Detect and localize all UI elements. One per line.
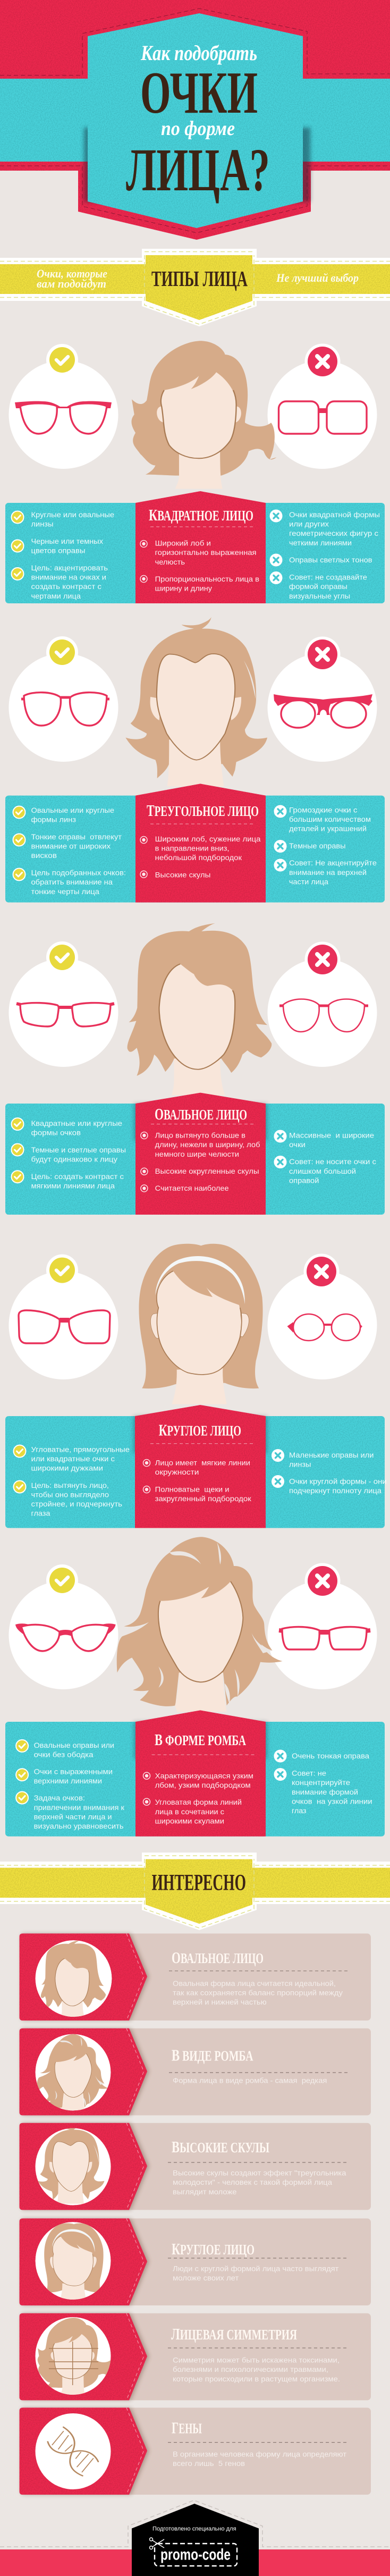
heading text: ИНТЕРЕСНО: [152, 1871, 246, 1896]
list of good frames: Очки с выраженными: [34, 1767, 113, 1775]
card text: выглядит моложе: [173, 2188, 237, 2196]
list of good frames: мягкими линиями лица: [31, 1181, 115, 1190]
left caption: [37, 267, 107, 290]
card text: [173, 2264, 339, 2282]
list of good frames: [31, 1119, 126, 1190]
list of bad frames: [289, 1451, 387, 1495]
list of bad frames: [292, 1752, 372, 1815]
teal middle band: [0, 79, 390, 162]
section: diamond face: [5, 1537, 385, 1837]
red band: [0, 2549, 390, 2576]
left circle with good glasses: [9, 1255, 118, 1379]
right circle with bad glasses: [268, 1563, 377, 1689]
card text: [173, 2356, 340, 2383]
face description: лбом, узким подбородком: [155, 1781, 251, 1789]
face description: Широкий лоб и: [155, 539, 211, 548]
credit line: Подготовлено специально для: [152, 2526, 236, 2532]
list of bad frames: Маленькие оправы или: [289, 1451, 374, 1459]
info panel: oval face: [5, 1093, 385, 1215]
logo: [150, 2538, 237, 2566]
bullets: [140, 837, 147, 878]
card text: болезнями и психологическими травмами,: [173, 2365, 328, 2373]
list of good frames: Овальные или круглые: [31, 806, 114, 814]
stitched seam: [0, 2501, 390, 2547]
list of bad frames: внимание на верхней: [289, 868, 367, 877]
list of bad frames: Совет: не носите очки с: [289, 1157, 376, 1166]
list of bad frames: Массивные и широкие: [289, 1131, 374, 1140]
info panel: diamond face: [5, 1710, 385, 1837]
list of bad frames: Очень тонкая оправа: [292, 1752, 369, 1760]
face description: Полноватые щеки и: [155, 1485, 230, 1493]
list of bad frames: оправой: [289, 1176, 319, 1185]
card text: молодости" - человек с такой формой лица: [173, 2178, 332, 2186]
list of good frames: Цель: создать контраст с: [31, 1172, 124, 1181]
panel title: ОВАЛЬНОЕ ЛИЦО: [155, 1105, 247, 1123]
list of good frames: Круглые или овальные: [31, 510, 114, 519]
list of good frames: [31, 1445, 130, 1518]
header: [0, 0, 390, 240]
face description: Высокие округленные скулы: [155, 1167, 259, 1175]
fact card: round face: [19, 2218, 371, 2305]
list of good frames: внимание на очках и: [31, 573, 106, 582]
right caption: Не лучший выбор: [276, 271, 359, 284]
lower red band with badge backing: [0, 162, 390, 240]
list of bad frames: Очки круглой формы - они: [289, 1477, 387, 1485]
list of good frames: визуально уравновесить: [34, 1822, 124, 1830]
cross icons: [274, 1750, 287, 1781]
bullets: [143, 1460, 150, 1493]
list of good frames: Черные или темных: [31, 537, 103, 545]
cross icons: [270, 509, 283, 584]
heading text: ТИПЫ ЛИЦА: [151, 266, 248, 291]
face description: Угловатая форма линий: [155, 1798, 242, 1806]
list of good frames: цветов оправы: [31, 546, 85, 555]
card text: Форма лица в виде ромба - самая редкая: [173, 2077, 327, 2085]
list of bad frames: деталей и украшений: [289, 824, 367, 833]
list of bad frames: формой оправы: [289, 582, 347, 591]
woman head: round face: [139, 1244, 263, 1404]
list of good frames: Квадратные или круглые: [31, 1119, 122, 1127]
list of bad frames: или других: [289, 520, 329, 528]
list of good frames: [34, 1741, 125, 1830]
left circle with good glasses: [9, 344, 118, 469]
card text: моложе своих лет: [173, 2274, 239, 2282]
right circle with bad glasses: [268, 343, 377, 469]
portrait: [35, 1940, 112, 2018]
face description: [155, 1772, 253, 1825]
face description: в направлении вниз,: [155, 844, 230, 853]
list of bad frames: очки: [289, 1140, 306, 1149]
list of bad frames: большим количеством: [289, 815, 371, 823]
face description: [155, 1131, 260, 1192]
face description: [155, 835, 261, 879]
list of good frames: формы линз: [31, 815, 76, 824]
face description: челюсть: [155, 558, 185, 566]
section: triangular face: [5, 617, 385, 903]
panel title: ТРЕУГОЛЬНОЕ ЛИЦО: [147, 801, 259, 820]
section: square face: [5, 341, 385, 603]
list of bad frames: части лица: [289, 877, 328, 886]
bullets: [143, 1772, 150, 1805]
list of bad frames: Совет: Не акцентируйте: [289, 858, 377, 867]
right circle with bad glasses: [268, 637, 377, 762]
face description: широкими скулами: [155, 1817, 224, 1825]
list of bad frames: Громоздкие очки с: [289, 806, 357, 814]
list of bad frames: линзы: [289, 1460, 311, 1468]
list of good frames: формы очков: [31, 1129, 81, 1137]
list of bad frames: Очки квадратной формы: [289, 510, 380, 519]
card text: которые происходили в растущем организме.: [173, 2375, 340, 2383]
woman head: square face: [131, 341, 276, 489]
list of bad frames: Оправы светлых тонов: [289, 555, 372, 564]
list of bad frames: визуальные углы: [289, 592, 350, 600]
card text: [173, 1980, 343, 2006]
face description: закругленный подбородок: [155, 1494, 252, 1503]
card title: КРУГЛОЕ ЛИЦО: [172, 2240, 255, 2258]
left caption: Очки, которые: [37, 267, 107, 280]
title: ОЧКИ: [140, 60, 258, 126]
check icons: [16, 1740, 28, 1804]
section: round face: [5, 1244, 387, 1528]
left caption: вам подойдут: [37, 277, 106, 290]
red top band: [0, 0, 390, 79]
footer: [0, 2501, 390, 2576]
heading band: interesting: [0, 1853, 390, 1930]
cross icons: [272, 1449, 284, 1488]
card text: так как сохраняется баланс пропорций между: [173, 1989, 343, 1997]
teal badge: [88, 13, 303, 228]
list of good frames: верхними линиями: [34, 1777, 102, 1785]
list of bad frames: геометрических фигур с: [289, 529, 378, 537]
card text: всего лишь 5 генов: [173, 2460, 245, 2468]
logo: promo-code: [160, 2546, 231, 2563]
face description: Считается наиболее: [155, 1184, 229, 1192]
list of good frames: тонкие черты лица: [31, 887, 99, 896]
card title: ВЫСОКИЕ СКУЛЫ: [172, 2137, 269, 2156]
bullets: [140, 540, 147, 583]
list of good frames: Овальные оправы или: [34, 1741, 114, 1749]
card text: Овальная форма лица считается идеальной,: [173, 1980, 336, 1988]
list of good frames: висков: [31, 851, 57, 860]
list of bad frames: очков на узкой линии: [292, 1797, 372, 1805]
portrait: [35, 2124, 111, 2205]
list of good frames: Цель подобранных очков:: [31, 869, 126, 877]
list of good frames: обратить внимание на: [31, 878, 113, 886]
icon: DNA helix: [48, 2427, 98, 2476]
cross icons: [274, 805, 287, 872]
panel title: В ФОРМЕ РОМБА: [155, 1730, 246, 1749]
list of good frames: линзы: [31, 520, 53, 528]
list of bad frames: Темные оправы: [289, 841, 345, 850]
list of bad frames: глаз: [292, 1806, 307, 1815]
black badge: [132, 2504, 259, 2576]
fact card: oval face: [19, 1933, 371, 2021]
list of good frames: глаза: [31, 1509, 50, 1518]
list of good frames: чтобы оно выглядело: [31, 1490, 109, 1499]
face description: лица в сочетании с: [155, 1807, 224, 1816]
white circle: [35, 2413, 111, 2489]
list of good frames: внимание от широких: [31, 842, 111, 851]
card title: ЛИЦЕВАЯ СИММЕТРИЯ: [171, 2325, 297, 2343]
face description: горизонтально выраженная: [155, 548, 257, 557]
left circle with good glasses: [9, 941, 118, 1067]
list of bad frames: концентрируйте: [292, 1778, 350, 1787]
list of good frames: верхней части лица и: [34, 1813, 112, 1821]
list of good frames: стройнее, и подчеркнуть: [31, 1500, 122, 1508]
heading band: face types: [0, 249, 390, 326]
info panel: triangular face: [5, 784, 385, 903]
face description: Характеризующаяся узким: [155, 1772, 253, 1780]
left circle with good glasses: [9, 636, 118, 762]
fact card: diamond: [19, 2028, 371, 2115]
list of bad frames: [289, 1131, 376, 1185]
face description: Пропорциональность лица в: [155, 575, 259, 583]
list of good frames: [31, 806, 126, 896]
list of good frames: чертами лица: [31, 592, 81, 600]
panel title: КРУГЛОЕ ЛИЦО: [159, 1420, 241, 1439]
bullets: [141, 1132, 148, 1192]
list of good frames: очки без ободка: [34, 1750, 94, 1758]
portrait: [35, 2034, 111, 2110]
face description: окружности: [155, 1468, 199, 1476]
title: ЛИЦА?: [126, 136, 270, 204]
right circle with bad glasses: [268, 942, 377, 1067]
list of bad frames: [289, 510, 380, 600]
card text: В организме человека форму лица определяют: [173, 2450, 347, 2458]
face description: немного шире челюсти: [155, 1150, 239, 1158]
face description: Лицо имеет мягкие линии: [155, 1459, 250, 1467]
face description: ширину и длину: [155, 584, 212, 593]
right circle with bad glasses: [268, 1253, 377, 1379]
info panel: square face: [5, 491, 385, 603]
info panel: round face: [5, 1405, 387, 1528]
face description: Лицо вытянуто больше в: [155, 1131, 245, 1140]
card title: ОВАЛЬНОЕ ЛИЦО: [172, 1948, 264, 1967]
fact card: genes: [19, 2407, 371, 2495]
face description: [155, 1459, 252, 1503]
card text: верхней и нижней частью: [173, 1998, 267, 2006]
fact card: facial symmetry: [19, 2313, 371, 2400]
woman head: diamond face: [117, 1537, 283, 1712]
section: oval face: [5, 923, 385, 1215]
list of bad frames: [289, 806, 377, 886]
list of good frames: Тонкие оправы отвлекут: [31, 832, 122, 841]
list of good frames: привлечении внимания к: [34, 1803, 125, 1812]
title: по форме: [161, 117, 235, 140]
portrait with symmetry grid: [35, 2317, 113, 2395]
card title: В ВИДЕ РОМБА: [172, 2045, 253, 2064]
list of bad frames: слишком большой: [289, 1167, 356, 1175]
face description: Широким лоб, сужение лица: [155, 835, 261, 843]
list of good frames: Задача очков:: [34, 1794, 85, 1802]
woman head: triangular face: [125, 617, 267, 786]
list of bad frames: подчеркнут полноту лица: [289, 1486, 381, 1495]
list of good frames: Цель: акцентировать: [31, 563, 108, 572]
cross icons: [274, 1130, 287, 1168]
list of bad frames: Совет: не создавайте: [289, 573, 367, 582]
card text: Симметрия может быть искажена токсинами,: [173, 2356, 340, 2364]
list of good frames: будут одинаково к лицу: [31, 1155, 117, 1163]
face description: [155, 539, 259, 593]
panel title: КВАДРАТНОЕ ЛИЦО: [149, 506, 253, 524]
list of bad frames: четкими линиями: [289, 538, 352, 547]
card text: [173, 2450, 347, 2468]
portrait: [35, 2222, 111, 2300]
card title: ГЕНЫ: [172, 2419, 202, 2437]
woman head: oval face: [128, 923, 272, 1095]
check icons: [13, 806, 26, 880]
title: Как подобрать: [140, 41, 257, 65]
card text: Люди с круглой формой лица часто выглядят: [173, 2264, 339, 2272]
check icons: [12, 1118, 23, 1183]
card text: Высокие скулы создают эффект "треугольника: [173, 2169, 346, 2177]
list of good frames: [31, 510, 114, 600]
list of bad frames: Совет: не: [292, 1769, 326, 1778]
list of good frames: Темные и светлые оправы: [31, 1146, 126, 1154]
list of good frames: или квадратные очки с: [31, 1454, 115, 1463]
left circle with good glasses: [9, 1564, 118, 1689]
check icons: [12, 511, 23, 580]
list of bad frames: внимание формой: [292, 1788, 358, 1796]
fact card: high cheekbones: [19, 2123, 371, 2210]
list of good frames: Цель: вытянуть лицо,: [31, 1481, 109, 1489]
face description: небольшой подбородок: [155, 853, 242, 862]
face description: длину, нежели в ширину, лоб: [155, 1140, 260, 1149]
list of good frames: создать контраст с: [31, 582, 101, 591]
card text: [173, 2169, 346, 2196]
list of good frames: широкими дужками: [31, 1464, 103, 1472]
face description: Высокие скулы: [155, 870, 210, 879]
list of good frames: Угловатые, прямоугольные: [31, 1445, 130, 1453]
title: [126, 41, 270, 204]
check icons: [14, 1445, 26, 1493]
